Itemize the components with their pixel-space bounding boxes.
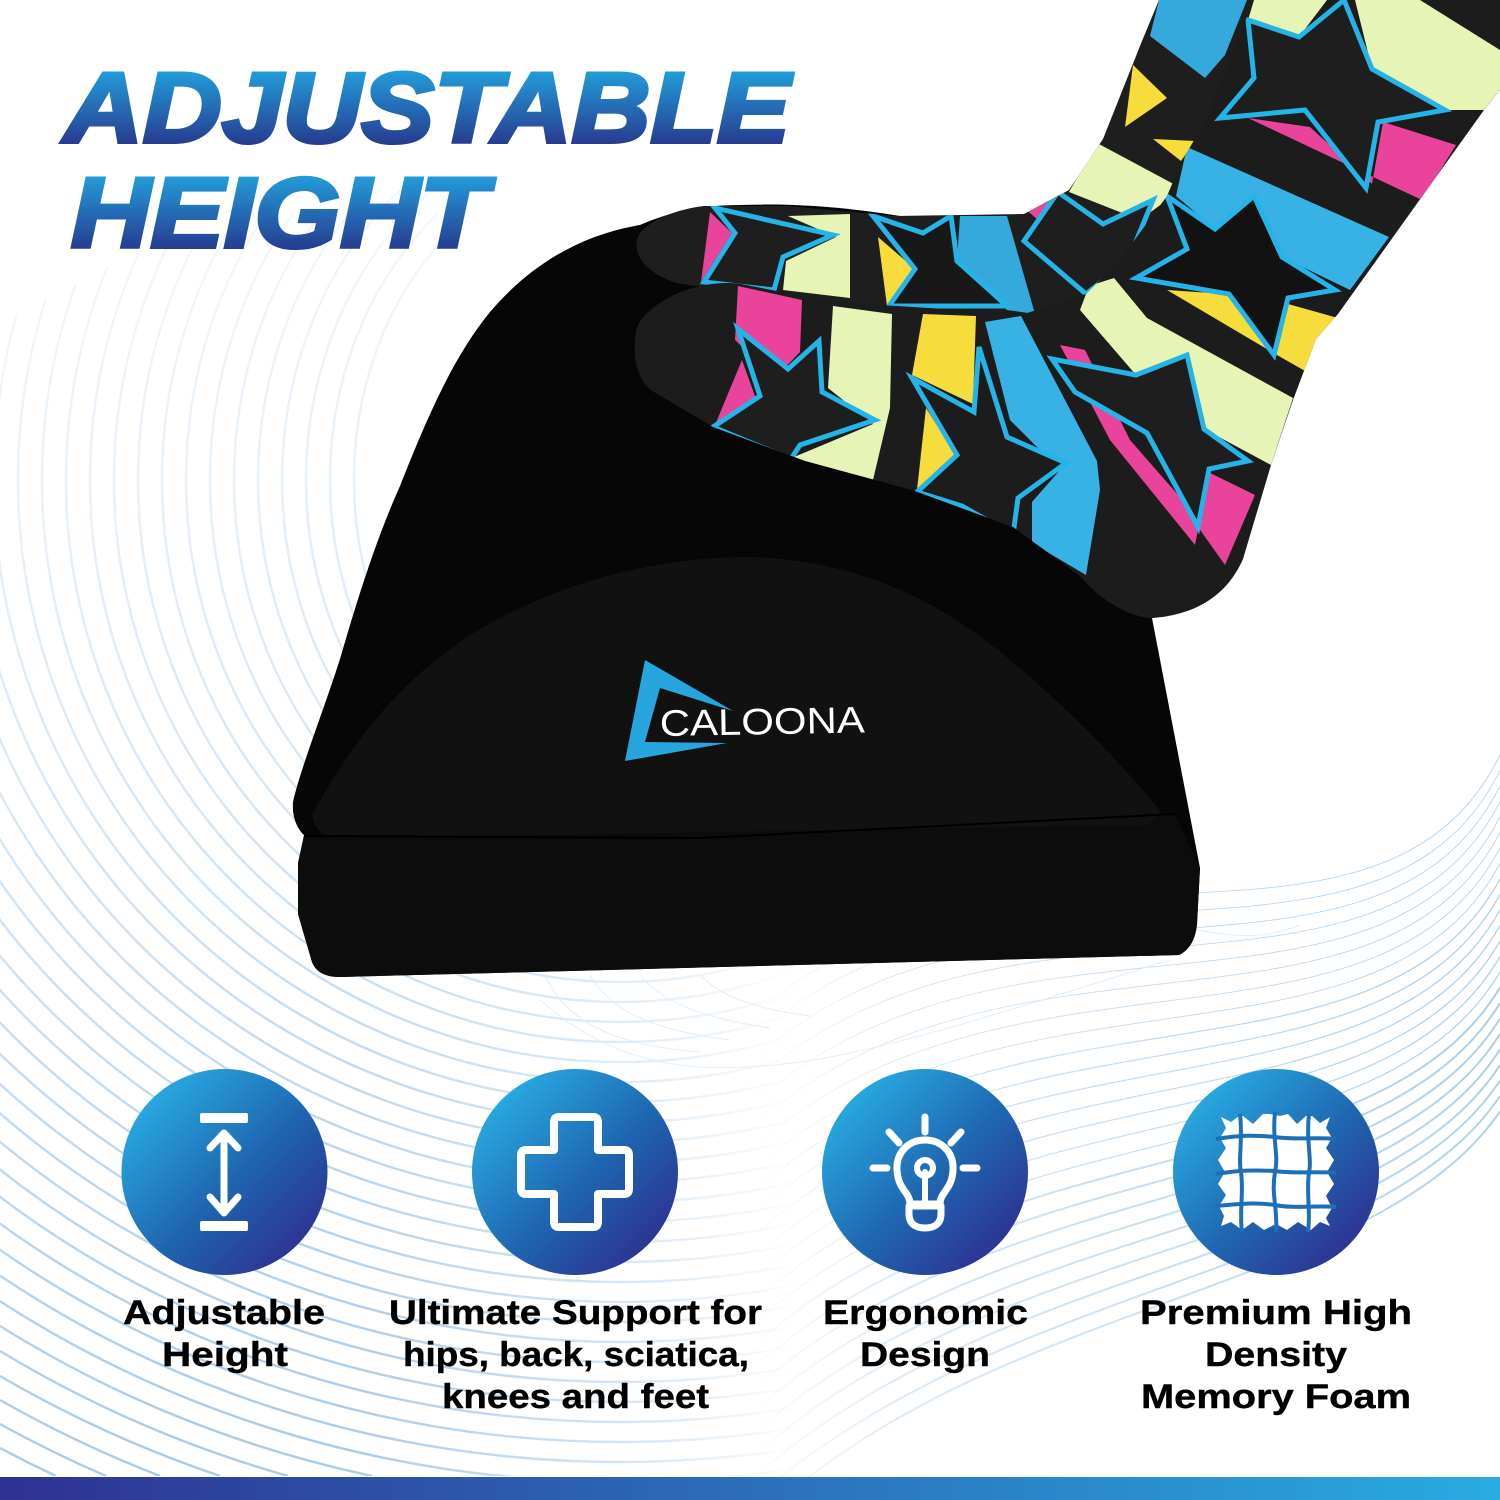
pillow base and top body bbox=[293, 205, 1200, 977]
label: memory foam: Premium High bbox=[1140, 1294, 1412, 1332]
brand logo: Caloona bbox=[625, 660, 865, 761]
bottom gradient band bbox=[0, 1477, 1500, 1500]
title line 1: ADJUSTABLE bbox=[61, 52, 793, 163]
feature: ergonomic design bbox=[822, 1069, 1028, 1374]
label: ultimate support: hips, back, sciatica, bbox=[403, 1336, 749, 1374]
label: ultimate support: knees and feet bbox=[442, 1378, 709, 1416]
logo triangle mark bbox=[625, 660, 733, 761]
label: adjustable height: Adjustable bbox=[123, 1294, 325, 1332]
feature: adjustable height bbox=[122, 1069, 328, 1374]
pillow semicircular side face bbox=[312, 557, 1161, 838]
icon: foam grid bbox=[1173, 1069, 1379, 1275]
label: ultimate support: Ultimate Support for bbox=[389, 1294, 762, 1332]
pillow lower base panel bbox=[298, 815, 1200, 977]
foam footrest pillow bbox=[293, 205, 1200, 977]
feature: memory foam bbox=[1140, 1069, 1412, 1416]
front sock bbox=[620, 0, 1500, 640]
label: ergonomic design: Design bbox=[860, 1336, 990, 1374]
background wave lines, left fan bbox=[0, 190, 767, 1476]
background wave lines, right fan bbox=[760, 755, 1500, 1497]
logo wordmark: CALOONA bbox=[659, 699, 865, 744]
label: memory foam: Density bbox=[1205, 1336, 1347, 1374]
back sock bbox=[636, 0, 1254, 314]
icon: medical cross bbox=[472, 1069, 678, 1275]
icon: light bulb bbox=[822, 1069, 1028, 1275]
title line 2: HEIGHT bbox=[71, 157, 495, 268]
title bbox=[61, 52, 793, 268]
feature: ultimate support bbox=[389, 1069, 762, 1416]
label: adjustable height: Height bbox=[162, 1336, 288, 1374]
label: ergonomic design: Ergonomic bbox=[823, 1294, 1028, 1332]
label: memory foam: Memory Foam bbox=[1141, 1378, 1411, 1416]
background pale mesh under the pillow bbox=[540, 925, 1300, 1068]
seam between pillow parts bbox=[304, 814, 1175, 838]
icon: height arrows bbox=[122, 1069, 328, 1275]
